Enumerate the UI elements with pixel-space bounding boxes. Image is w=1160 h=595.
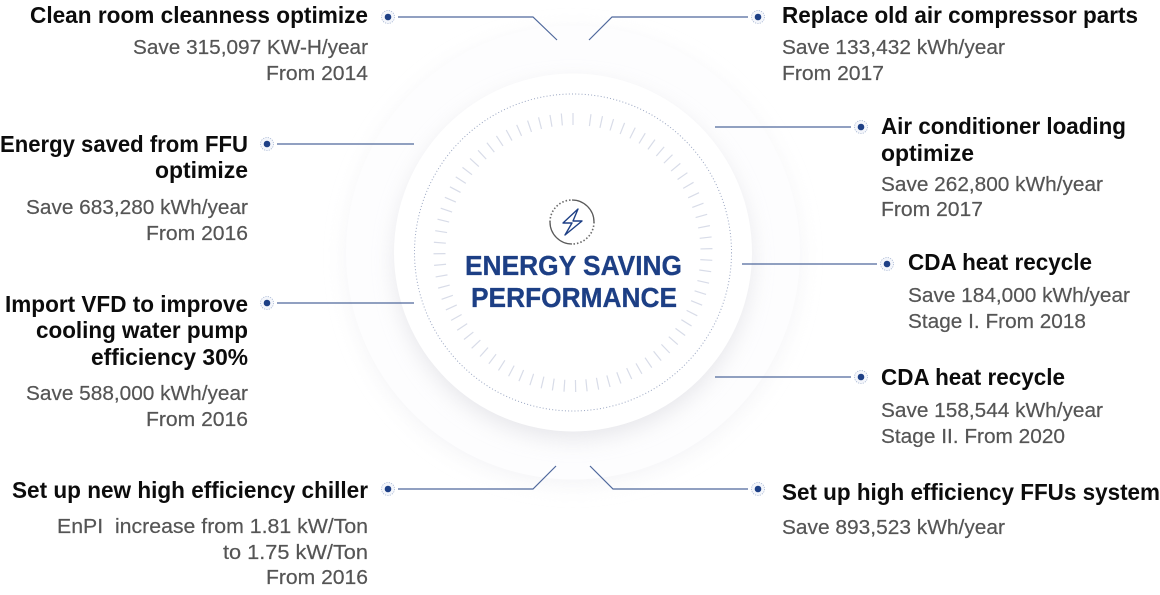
item: CDA heat recycle stage I: Save 184,000 kWh/year: [908, 285, 1130, 307]
item: clean room cleanness: Save 315,097 KW-H/year: [133, 37, 368, 59]
item: air conditioner loading: optimize: [881, 140, 974, 166]
item: clean room cleanness: From 2014: [266, 63, 368, 85]
item: CDA heat recycle stage I: Stage I. From 2018: [908, 311, 1086, 333]
icon: lightning bolt in ring: [550, 200, 594, 244]
item: high efficiency chiller: [12, 477, 368, 589]
title: PERFORMANCE: [471, 282, 677, 313]
item: high efficiency FFUs: Set up high efficiency FFUs system: [782, 479, 1160, 505]
dotted ring: [414, 94, 732, 411]
item: import VFD: [5, 291, 248, 431]
connector: CDA stage II: [715, 370, 868, 384]
title: ENERGY SAVING: [465, 250, 682, 281]
item: high efficiency chiller: to 1.75 kW/Ton: [223, 542, 368, 564]
item: high efficiency FFUs: [782, 479, 1160, 539]
item: air conditioner loading: Save 262,800 kWh/year: [881, 174, 1103, 196]
item: energy saved from FFU: From 2016: [146, 223, 248, 245]
item: high efficiency chiller: Set up new high efficiency chiller: [12, 477, 368, 503]
item: high efficiency chiller: From 2016: [266, 567, 368, 589]
item: CDA heat recycle stage I: [908, 249, 1130, 333]
connector: air conditioner: [715, 120, 868, 134]
item: clean room cleanness: [30, 2, 368, 85]
item: import VFD: From 2016: [146, 409, 248, 431]
item: CDA heat recycle stage I: CDA heat recycle: [908, 249, 1092, 275]
tick ring: [434, 113, 712, 392]
item: air compressor parts: Save 133,432 kWh/year: [782, 37, 1005, 59]
central circle backdrop: [346, 26, 800, 484]
item: CDA heat recycle stage II: Stage II. From 2020: [881, 426, 1065, 448]
item: air conditioner loading: [881, 113, 1126, 221]
item: CDA heat recycle stage II: [881, 364, 1103, 448]
connector: VFD: [260, 296, 414, 310]
item: import VFD: Import VFD to improve: [5, 291, 248, 317]
item: CDA heat recycle stage II: Save 158,544 kWh/year: [881, 400, 1103, 422]
item: import VFD: cooling water pump: [36, 317, 248, 343]
item: energy saved from FFU: optimize: [155, 157, 248, 183]
item: CDA heat recycle stage II: CDA heat recycle: [881, 364, 1065, 390]
title: [465, 250, 682, 313]
connector: clean room: [382, 10, 557, 40]
item: import VFD: efficiency 30%: [91, 344, 248, 370]
connector: FFUs system: [590, 466, 764, 496]
item: energy saved from FFU: [0, 131, 248, 245]
item: air conditioner loading: From 2017: [881, 199, 983, 221]
connector: FFU optimize: [260, 138, 414, 150]
item: high efficiency FFUs: Save 893,523 kWh/year: [782, 517, 1005, 539]
item: energy saved from FFU: Save 683,280 kWh/year: [26, 197, 248, 219]
connector: chiller: [382, 466, 556, 496]
item: air compressor parts: Replace old air compressor parts: [782, 2, 1138, 28]
connector: CDA stage I: [742, 258, 894, 270]
item: air compressor parts: From 2017: [782, 63, 884, 85]
item: air conditioner loading: Air conditioner loading: [881, 113, 1126, 139]
connector: air compressor: [589, 10, 764, 40]
item: clean room cleanness: Clean room cleanness optimize: [30, 2, 368, 28]
item: air compressor parts: [782, 2, 1138, 85]
item: import VFD: Save 588,000 kWh/year: [26, 383, 248, 405]
item: high efficiency chiller: EnPI increase from 1.81 kW/Ton: [57, 516, 368, 538]
item: energy saved from FFU: Energy saved from FFU: [0, 131, 248, 157]
